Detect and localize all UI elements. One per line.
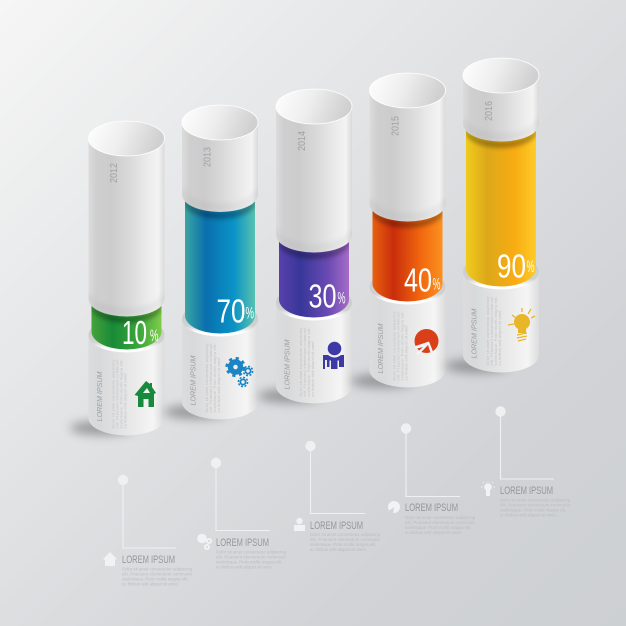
ground shadow 2013	[164, 405, 228, 419]
body text: elit. Praesent elementum commodo	[405, 520, 476, 525]
icon: house	[103, 552, 117, 566]
vertical body text: Dolor sit amet consectetur adipiscing	[299, 328, 303, 396]
vertical body text: eu finibus velit aliquet sit amet.	[404, 324, 408, 380]
icon: pie	[388, 501, 400, 513]
vertical body text: Dolor sit amet consectetur adipiscing	[205, 344, 209, 412]
marker	[401, 423, 411, 434]
cylinder 2012	[70, 121, 164, 436]
legend 2	[197, 458, 287, 570]
body text: Dolor sit amet consectetur adipiscing	[405, 515, 476, 520]
vertical body text: Dolor sit amet consectetur adipiscing	[112, 360, 116, 428]
ground shadow 2012	[70, 421, 134, 435]
value 10%: %	[150, 327, 159, 345]
body text: Dolor sit amet consectetur adipiscing	[310, 532, 381, 537]
body text: scelerisque. Proin mollis magna elit,	[500, 508, 566, 512]
icon: gears	[227, 358, 253, 387]
connector	[123, 480, 176, 548]
vertical body text: scelerisque. Proin mollis magna elit,	[494, 296, 498, 366]
body text: scelerisque. Proin mollis magna elit,	[405, 525, 471, 530]
vertical body text: elit. Praesent elementum commodo	[490, 296, 494, 366]
vertical body text	[205, 344, 221, 412]
icon: person	[323, 342, 344, 369]
vertical body text: elit. Praesent elementum commodo	[209, 344, 213, 412]
vertical body text: eu finibus velit aliquet sit amet.	[217, 356, 221, 412]
marker	[495, 406, 506, 417]
value 10%: 10	[122, 314, 147, 351]
body text: eu finibus velit aliquet sit amet.	[216, 564, 273, 570]
legend 1	[103, 475, 193, 586]
connector	[500, 412, 554, 479]
vertical label: LOREM IPSUM	[472, 308, 478, 358]
cylinder 2015	[351, 73, 446, 388]
body text: elit. Praesent elementum commodo	[310, 537, 381, 542]
vertical body text: elit. Praesent elementum commodo	[303, 328, 307, 396]
vertical body text: scelerisque. Proin mollis magna elit,	[213, 344, 217, 412]
vertical body text	[392, 312, 408, 380]
ground shadow 2016	[445, 359, 509, 373]
marker	[211, 458, 221, 468]
value 70%: %	[246, 304, 254, 322]
value 40%: %	[432, 276, 441, 294]
body text: Dolor sit amet consectetur adipiscing	[122, 566, 193, 572]
ground shadow 2014	[258, 389, 322, 403]
body text: eu finibus velit aliquet sit amet.	[405, 530, 462, 535]
vertical body text	[486, 296, 502, 366]
year 2016: 2016	[484, 101, 495, 121]
body text: scelerisque. Proin mollis magna elit,	[310, 542, 376, 547]
vertical body text: Dolor sit amet consectetur adipiscing	[486, 296, 490, 366]
vertical body text: elit. Praesent elementum commodo	[396, 312, 400, 380]
vertical body text	[112, 360, 128, 428]
body text: Dolor sit amet consectetur adipiscing	[216, 550, 287, 554]
year 2014: 2014	[297, 131, 308, 151]
body text	[216, 550, 287, 570]
body text	[405, 515, 476, 535]
value 30%: 30	[308, 278, 336, 314]
vertical label: LOREM IPSUM	[190, 355, 198, 406]
legend 3	[294, 441, 381, 552]
body text: eu finibus velit aliquet sit amet.	[500, 512, 557, 518]
year 2015: 2015	[390, 116, 402, 136]
icon: pie chart	[414, 329, 438, 356]
vertical label: LOREM IPSUM	[378, 323, 385, 374]
body text: elit. Praesent elementum commodo	[500, 502, 571, 508]
vertical body text: eu finibus velit aliquet sit amet.	[124, 372, 128, 428]
cylinder 2013	[164, 105, 258, 420]
vertical body text: eu finibus velit aliquet sit amet.	[311, 340, 315, 396]
value 30%: %	[338, 290, 346, 308]
year 2013: 2013	[202, 147, 214, 167]
value 40%: 40	[404, 262, 432, 298]
vertical body text: scelerisque. Proin mollis magna elit,	[307, 328, 311, 396]
icon: person	[294, 518, 305, 531]
vertical body text	[299, 328, 315, 396]
legend 5	[481, 406, 571, 518]
legend 4	[388, 423, 476, 535]
body text	[122, 566, 193, 586]
vertical body text: elit. Praesent elementum commodo	[116, 360, 120, 428]
heading: LOREM IPSUM	[216, 537, 269, 549]
value 70%: 70	[216, 292, 246, 330]
vertical label: LOREM IPSUM	[97, 371, 104, 422]
value 90%: %	[526, 258, 535, 276]
body text: eu finibus velit aliquet sit amet.	[310, 547, 367, 552]
icon: bulb	[481, 481, 495, 496]
cylinder 2014	[258, 89, 352, 404]
body text: elit. Praesent elementum commodo	[122, 572, 193, 576]
heading: LOREM IPSUM	[500, 485, 553, 497]
heading: LOREM IPSUM	[405, 502, 458, 514]
icon: light bulb	[508, 308, 535, 341]
body text	[500, 498, 571, 518]
connector	[216, 463, 270, 530]
connector	[310, 446, 365, 514]
value 90%: 90	[497, 248, 526, 284]
cylinder 2016	[445, 58, 539, 373]
marker	[305, 441, 316, 451]
year 2012: 2012	[109, 163, 120, 183]
body text: scelerisque. Proin mollis magna elit,	[216, 560, 282, 564]
body text: scelerisque. Proin mollis magna elit,	[122, 576, 188, 582]
vertical body text: Dolor sit amet consectetur adipiscing	[392, 312, 396, 380]
vertical body text: scelerisque. Proin mollis magna elit,	[120, 360, 124, 428]
vertical body text: scelerisque. Proin mollis magna elit,	[400, 312, 404, 380]
ground shadow 2015	[351, 374, 415, 388]
marker	[118, 475, 128, 485]
vertical label: LOREM IPSUM	[284, 339, 292, 390]
body text: eu finibus velit aliquet sit amet.	[122, 582, 179, 586]
connector	[406, 428, 460, 496]
body text: Dolor sit amet consectetur adipiscing	[500, 498, 571, 502]
heading: LOREM IPSUM	[122, 554, 175, 566]
heading: LOREM IPSUM	[310, 520, 363, 532]
icon: house	[134, 381, 156, 407]
body text: elit. Praesent elementum commodo	[216, 554, 287, 560]
body text	[310, 532, 381, 552]
vertical body text: eu finibus velit aliquet sit amet.	[498, 310, 502, 366]
icon: gears	[197, 534, 212, 550]
